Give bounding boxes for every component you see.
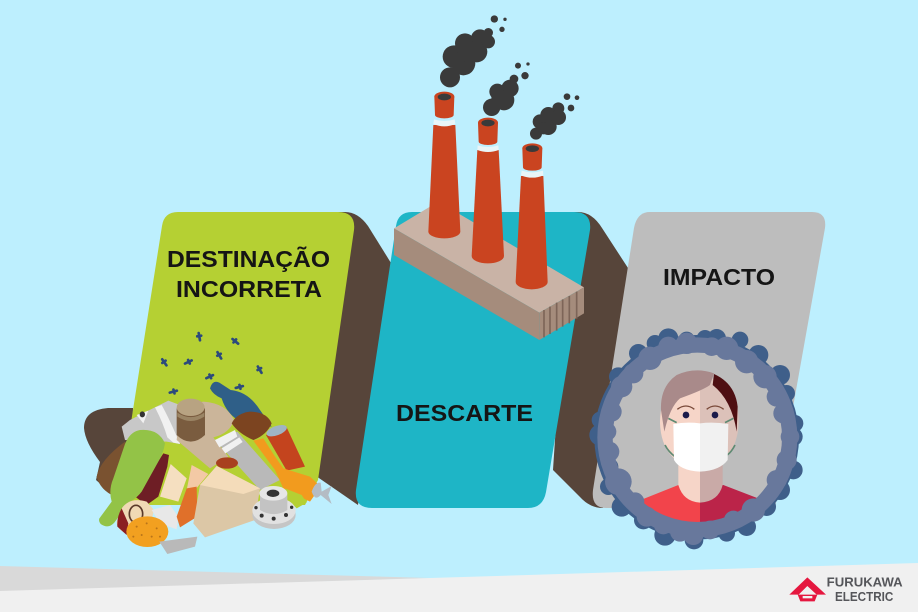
logo: furukawa electric [789, 575, 903, 604]
smoke 1 [440, 15, 507, 87]
chimney 2 [472, 118, 504, 263]
green bottle [99, 430, 165, 526]
mask [673, 423, 700, 472]
person [644, 370, 757, 522]
brown bag [97, 442, 137, 497]
smoke 2 [483, 62, 530, 116]
eyebrows [677, 406, 724, 409]
factory base [394, 202, 584, 340]
hair [661, 370, 714, 432]
orange wrapper [253, 438, 321, 502]
dark red bottle [135, 453, 169, 505]
blue bottle [210, 382, 272, 427]
face [660, 390, 700, 458]
gray part [152, 505, 178, 529]
chimney 1 [428, 92, 460, 238]
icon: factory with chimneys and smoke [394, 15, 584, 340]
brown fibre ball [232, 412, 272, 440]
ribbon: left brown fold [84, 408, 133, 510]
inner circle backdrop [610, 349, 785, 524]
logo text: FURUKAWA [827, 575, 903, 589]
fish tail [312, 483, 332, 504]
logo subtext: ELECTRIC [835, 590, 893, 604]
red can [265, 423, 305, 471]
striped scrap [285, 488, 307, 508]
dark outer ring [589, 328, 803, 549]
ribbon: centre-right brown fold [553, 212, 628, 508]
cardboard box [193, 457, 260, 537]
jar [177, 399, 205, 442]
light inner ring [598, 333, 799, 545]
gray flap [159, 537, 197, 554]
metal flange [252, 486, 296, 529]
footer band [0, 563, 918, 612]
large tan tube [177, 402, 234, 468]
ribbon: centre-left brown fold [316, 212, 391, 505]
shirt [644, 485, 700, 522]
panel: descarte [356, 212, 590, 508]
eyes [683, 412, 689, 418]
cream panel [160, 464, 187, 502]
panel: destinação incorreta [118, 212, 354, 505]
smoke 3 [530, 93, 579, 140]
neck [678, 463, 700, 503]
gray mug [122, 401, 180, 444]
heading: impacto: IMPACTO [663, 264, 775, 290]
gray cylinder [215, 430, 280, 490]
smog ring [589, 328, 803, 549]
corn [177, 465, 208, 527]
striped can [117, 500, 154, 535]
heading: incorreta: INCORRETA [176, 276, 322, 302]
chimney 3 [516, 143, 548, 289]
mask straps [665, 418, 735, 457]
heading: destinação incorreta: DESTINAÇÃO [167, 245, 330, 272]
logo mark [789, 577, 826, 601]
icon: person in smog ring [589, 328, 803, 549]
heading: descarte: DESCARTE [396, 400, 533, 426]
flies [161, 333, 263, 395]
pineapple [126, 516, 168, 547]
icon: garbage pile [97, 333, 332, 554]
panel: impacto [593, 212, 825, 508]
